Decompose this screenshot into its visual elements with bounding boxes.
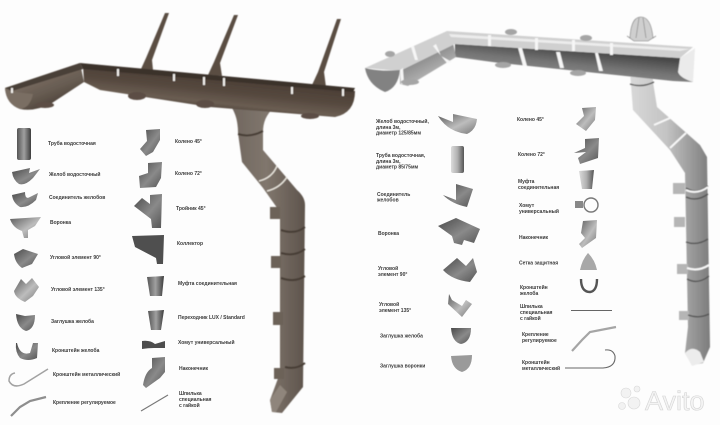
label: Угловой элемент 135: Угловой (379, 302, 399, 308)
label: Соединитель желобов: Соединитель (377, 192, 410, 198)
grey downpipe (630, 72, 710, 366)
label: Желоб водосточный: Желоб водосточный, (376, 119, 429, 125)
label: Колено 45: Колено 45° (517, 117, 544, 123)
label: Воронка: Воронка (50, 220, 71, 226)
label: Хомут универсальный: Хомут (519, 203, 534, 209)
label: Муфта соединительная: Муфта соединительная (178, 280, 237, 287)
icon: universal clamp (575, 198, 598, 212)
panel: grey gutter system (365, 17, 710, 366)
icon: pipe (17, 128, 31, 160)
label: Шпилька: специальная (520, 310, 553, 316)
icon: corner 90 (443, 258, 477, 282)
grey gutter (365, 29, 695, 92)
label: Труба водосточная: диаметр 85/75мм (376, 164, 419, 170)
label: Сетка защитная: Сетка защитная (519, 260, 558, 266)
label: Угловой элемент 90: Угловой элемент 90° (50, 254, 101, 261)
label: Желоб водосточный: Желоб водосточный (48, 171, 100, 178)
label: Кронштейн желоба: Кронштейн желоба (52, 347, 100, 354)
label: Наконечник: Наконечник (179, 366, 209, 372)
label: Желоб водосточный: длина 3м, (376, 125, 401, 131)
icon: leaf guard dome (627, 17, 656, 41)
label: Угловой элемент 135: Угловой элемент 135° (51, 286, 105, 293)
icon: coupling (147, 276, 164, 296)
icon: nozzle (143, 357, 165, 388)
label: Угловой элемент 90: Угловой (378, 266, 398, 272)
label: Колено 72: Колено 72° (175, 171, 202, 177)
icon: funnel (438, 218, 480, 245)
panel: brown system parts (9, 128, 245, 416)
icon: elbow 72 (574, 138, 599, 164)
icon: universal clamp (142, 341, 165, 349)
label: Шпилька: с гайкой (520, 315, 541, 322)
icon: elbow 45 (576, 107, 596, 131)
brown gutter (5, 63, 355, 119)
icon: adjustable mount (11, 397, 46, 416)
icon: threaded stud (571, 310, 612, 312)
watermark: Avito (618, 386, 705, 416)
label: Кронштейн металлический: металлический (522, 365, 560, 372)
icon: gutter (438, 114, 477, 134)
icon: metal hook (9, 369, 48, 386)
panel: brown gutter system (5, 13, 355, 413)
label: Шпилька: с гайкой (179, 402, 200, 409)
brown downpipe (228, 102, 305, 413)
label: Шпилька: специальная (179, 397, 212, 403)
icon: gutter connector (12, 192, 38, 207)
label: Кронштейн металлический: Кронштейн (522, 360, 550, 366)
icon: connector (443, 184, 473, 207)
icon: collector (132, 235, 164, 264)
label: Шпилька: Шпилька (179, 391, 202, 397)
icon: gutter (12, 168, 40, 184)
icon: corner 90 (14, 249, 38, 268)
icon: elbow 72 (139, 162, 162, 188)
label: Труба водосточная: Труба водосточная (48, 140, 96, 147)
label: Труба водосточная: Труба водосточная, (376, 153, 425, 159)
label: Муфта соединительная: Муфта (518, 179, 534, 185)
label: Кронштейн металлический: Кронштейн металлический (53, 371, 120, 378)
icon: adapter (148, 310, 164, 330)
label: Кронштейн желоба: желоба (519, 290, 539, 297)
roof hooks (141, 13, 341, 87)
icon: funnel (10, 217, 41, 238)
icon: gutter bracket (581, 279, 597, 292)
label: Желоб водосточный: диаметр 125/85мм (376, 130, 421, 136)
label: Муфта соединительная: соединительная (518, 185, 559, 191)
label: Колено 72: Колено 72° (518, 152, 545, 158)
icon: nozzle (579, 220, 597, 248)
icon: gutter end cap (451, 328, 471, 344)
icon: gutter end cap (16, 314, 35, 331)
label: Заглушка воронки: Заглушка воронки (380, 364, 425, 370)
label: Колено 45: Колено 45° (175, 139, 202, 145)
label: Переходник: Переходник LUX / Standard (178, 315, 245, 321)
icon: tee 45 (134, 194, 162, 228)
label: Угловой элемент 90: элемент 90° (378, 272, 407, 278)
label: Кронштейн желоба: Кронштейн (520, 285, 548, 291)
icon: corner 135 (14, 278, 39, 302)
icon: elbow 45 (140, 129, 160, 156)
label: Хомут универсальный: Хомут универсальный (178, 339, 235, 346)
icon: metal hook (565, 350, 615, 368)
label: Соединитель желобов: Соединитель желобов (49, 194, 105, 201)
icon: threaded stud (141, 395, 168, 411)
icon: coupling (579, 170, 594, 189)
label: Крепление регулируемое: Крепление (522, 332, 549, 338)
icon: pipe (451, 146, 464, 173)
label: Труба водосточная: длина 3м, (376, 159, 401, 165)
label: Хомут универсальный: универсальный (519, 208, 559, 215)
label: Наконечник: Наконечник (519, 235, 549, 241)
label: Воронка: Воронка (378, 231, 399, 237)
icon: adjustable mount (572, 327, 616, 351)
label: Угловой элемент 135: элемент 135° (379, 308, 411, 314)
label: Крепление регулируемое: Крепление регулируемое (53, 400, 116, 406)
label: Шпилька: Шпилька (520, 304, 543, 310)
panel: grey system parts (375, 107, 616, 372)
icon: funnel end cap (451, 355, 472, 372)
label: Заглушка желоба: Заглушка желоба (380, 332, 423, 340)
label: Крепление регулируемое: регулируемое (522, 338, 557, 344)
icon: gutter bracket (16, 343, 38, 360)
label: Коллектор: Коллектор (177, 241, 203, 247)
watermark: Avito: Avito (645, 386, 705, 416)
icon: protective mesh (580, 253, 597, 270)
icon: corner 135 (448, 294, 472, 317)
label: Заглушка желоба: Заглушка желоба (51, 318, 94, 325)
label: Соединитель желобов: желобов (376, 196, 399, 204)
label: Тройник 45: Тройник 45° (176, 205, 206, 212)
